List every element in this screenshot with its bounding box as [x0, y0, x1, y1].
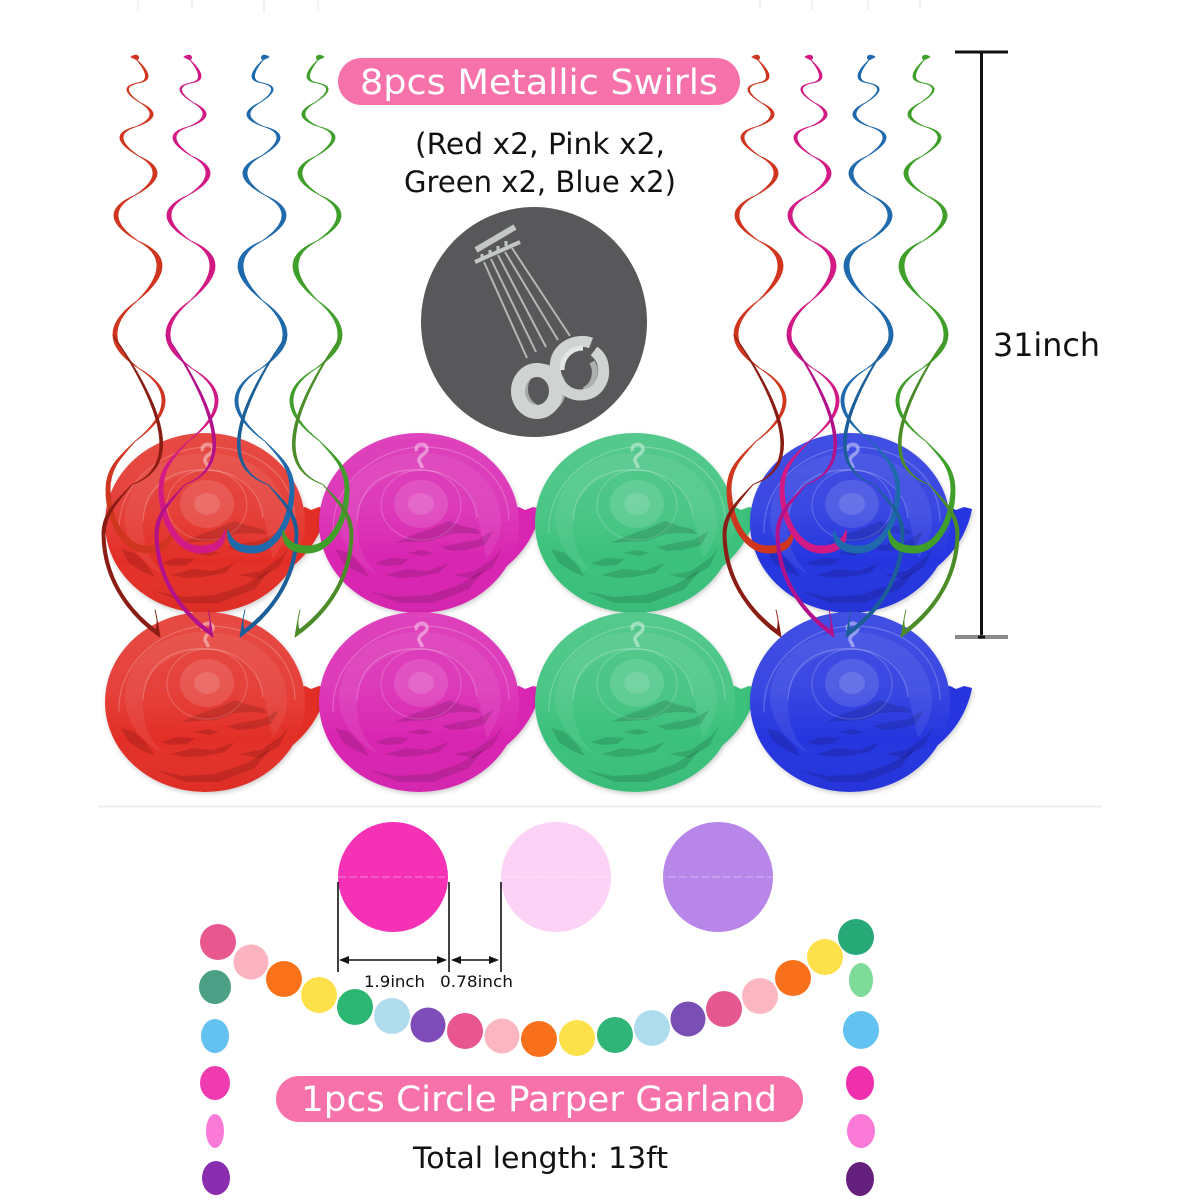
dimension arrows: circle diameter and spacing	[338, 882, 513, 991]
large paper circle samples	[338, 822, 773, 932]
photo: plastic hanging clips on grey circle	[421, 207, 647, 437]
heading pill: 1pcs Circle Parper Garland: 1pcs Circle Parper Garland	[301, 1080, 777, 1120]
section divider	[98, 806, 1102, 808]
colour breakdown text: (Red x2, Pink x2,	[415, 127, 665, 161]
left hanging swirls: red, pink, blue, green	[102, 55, 353, 637]
total length text: Total length: 13ft	[412, 1141, 668, 1175]
swirl discs: red, bottom row	[105, 612, 327, 792]
colour breakdown text	[404, 127, 676, 199]
colour breakdown text: Green x2, Blue x2)	[404, 165, 676, 199]
swirl discs: pink, top row	[319, 433, 541, 613]
swirl discs: pink, bottom row	[319, 612, 541, 792]
right hanging swirls: red, pink, blue, green	[723, 55, 959, 637]
heading pill: 8pcs Metallic Swirls: 8pcs Metallic Swirls	[360, 63, 718, 103]
swirl discs: red, top row	[105, 433, 327, 613]
swirl discs: green, bottom row	[535, 612, 757, 792]
dimension arrows: circle diameter and spacing: 0.78inch	[440, 972, 513, 991]
swirl discs: green, top row	[535, 433, 757, 613]
swirl discs: blue, bottom row	[750, 612, 972, 792]
dimension bar: 31inch height: 31inch	[993, 326, 1100, 364]
swirl discs: blue, top row	[750, 433, 972, 613]
faint hanger marks at top edge	[138, 0, 920, 12]
dimension arrows: circle diameter and spacing: 1.9inch	[364, 972, 425, 991]
circle paper garland	[199, 919, 879, 1196]
